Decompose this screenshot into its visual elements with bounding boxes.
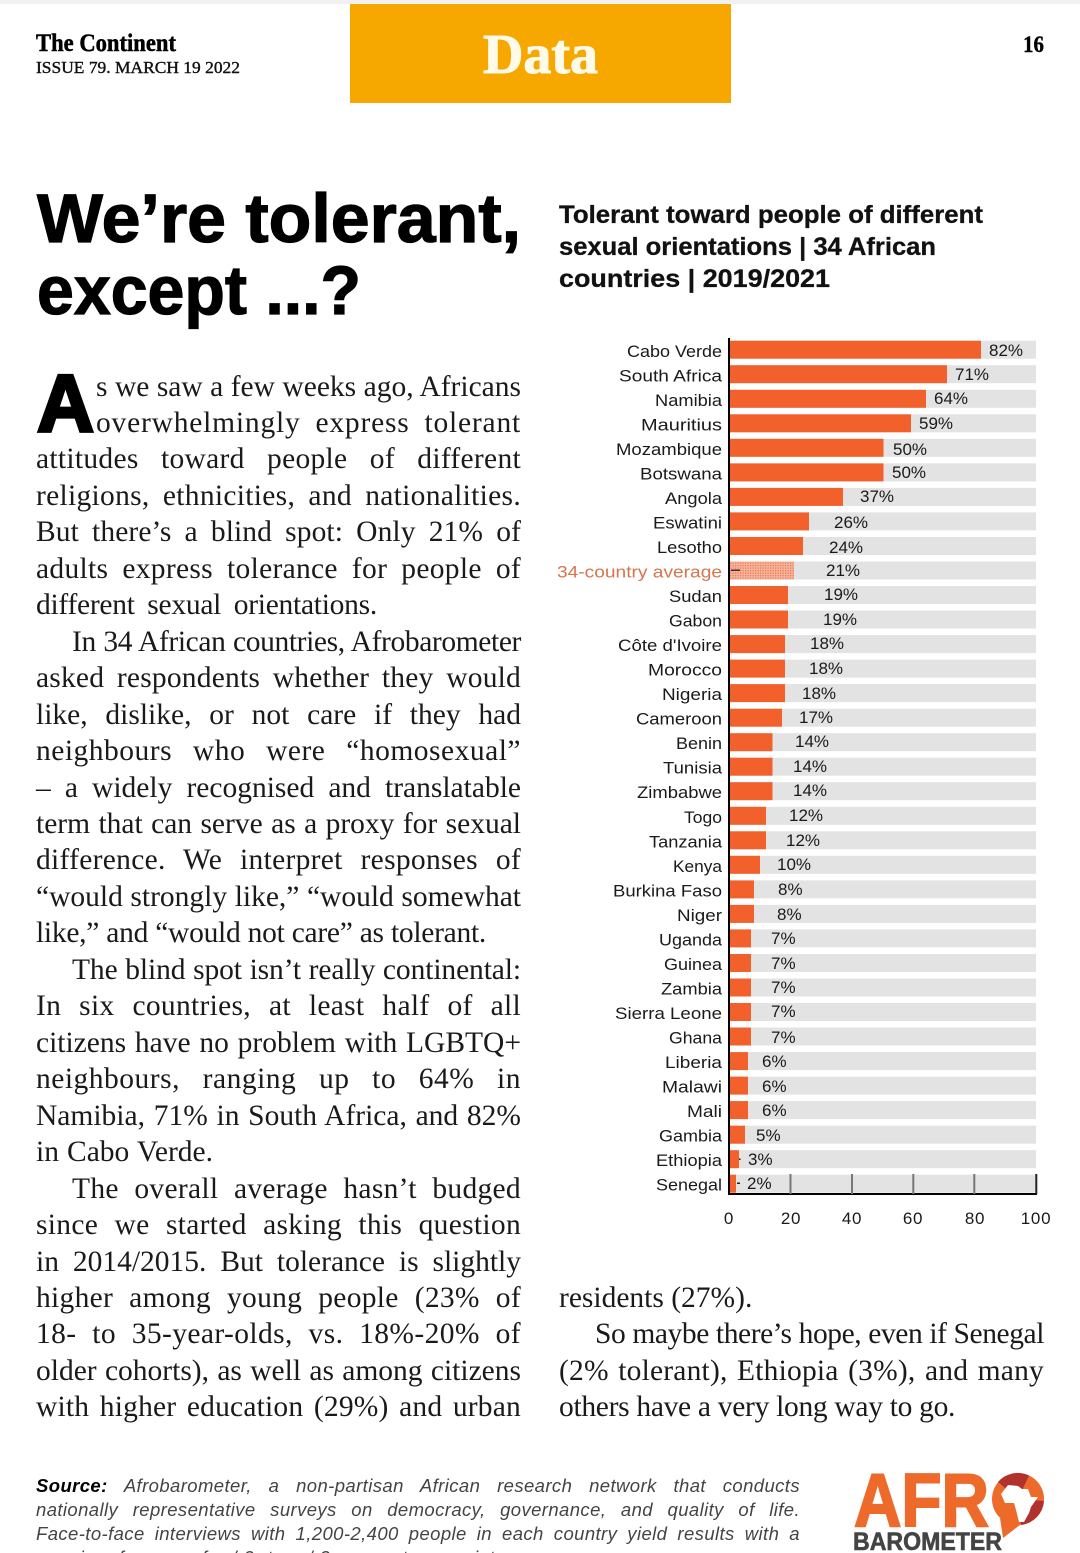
article paragraph 2: like, dislike, or not care if they had bbox=[36, 699, 521, 731]
bar: 34-country average: 34-country average bbox=[557, 563, 722, 582]
bar: Gambia: 5% bbox=[756, 1126, 781, 1145]
bar: Morocco bbox=[648, 659, 1036, 680]
bar: Ghana bbox=[669, 1028, 1036, 1048]
bar: Cabo Verde bbox=[627, 341, 1036, 361]
bar: Lesotho bbox=[657, 537, 1036, 557]
article paragraph 4 bbox=[36, 1173, 521, 1423]
article right column continuation: others have a very long way to go. bbox=[559, 1391, 955, 1423]
article paragraph 1: religions, ethnicities, and nationalities. bbox=[36, 480, 521, 512]
bar: Malawi: Malawi bbox=[662, 1078, 722, 1097]
chart axes and ticks: 60 bbox=[903, 1209, 923, 1228]
bar: Senegal: 2% bbox=[747, 1174, 772, 1193]
bar: Zambia: Zambia bbox=[661, 980, 723, 998]
bar: Nigeria bbox=[662, 684, 1036, 704]
drop cap A: A bbox=[37, 359, 94, 449]
article right column continuation: residents (27%). bbox=[559, 1282, 752, 1314]
chart title: countries | 2019/2021 bbox=[559, 265, 830, 293]
bar: Benin bbox=[676, 732, 1036, 753]
bar: Burkina Faso bbox=[613, 880, 1036, 900]
bar: Gabon: Gabon bbox=[669, 612, 722, 630]
bar: Uganda bbox=[659, 929, 1036, 949]
article right column continuation: (2% tolerant), Ethiopia (3%), and many bbox=[559, 1355, 1044, 1387]
chart axes and ticks bbox=[724, 338, 1051, 1228]
bar: Eswatini: 26% bbox=[834, 513, 868, 532]
bar: Tanzania: 12% bbox=[786, 831, 820, 850]
bar: Côte d'Ivoire: Côte d'Ivoire bbox=[618, 636, 722, 655]
article right column continuation bbox=[559, 1282, 1044, 1423]
main headline: except ...? bbox=[37, 252, 361, 329]
article paragraph 3: The blind spot isn’t really continental: bbox=[72, 954, 521, 986]
bar: Nigeria: 18% bbox=[802, 684, 836, 703]
bar: Gambia bbox=[659, 1126, 1036, 1146]
bar: Guinea: Guinea bbox=[664, 955, 723, 974]
chart title: sexual orientations | 34 African bbox=[559, 233, 936, 261]
logo: Afrobarometer bbox=[853, 1458, 1044, 1553]
bar: Ghana: Ghana bbox=[669, 1028, 723, 1048]
chart axes and ticks: 40 bbox=[842, 1209, 862, 1228]
article paragraph 4: The overall average hasn’t budged bbox=[72, 1173, 521, 1205]
article paragraph 3: neighbours, ranging up to 64% in bbox=[36, 1063, 521, 1095]
article paragraph 1: different sexual orientations. bbox=[36, 589, 377, 621]
bar: South Africa: 71% bbox=[955, 365, 989, 384]
bar: Cameroon: 17% bbox=[799, 708, 833, 727]
bar: Gabon: 19% bbox=[823, 610, 857, 629]
bar: Burkina Faso: 8% bbox=[778, 880, 803, 899]
article paragraph 3 bbox=[36, 954, 521, 1168]
bar: Namibia: Namibia bbox=[655, 391, 723, 410]
article paragraph 2: term that can serve as a proxy for sexual bbox=[36, 808, 521, 840]
bar: Cabo Verde: 82% bbox=[989, 341, 1023, 360]
article paragraph 3: Namibia, 71% in South Africa, and 82% bbox=[36, 1100, 521, 1132]
bar: Namibia: 64% bbox=[934, 389, 968, 408]
bar: Zambia bbox=[661, 978, 1036, 998]
bar: Zimbabwe bbox=[637, 781, 1036, 802]
bar: Kenya: 10% bbox=[777, 855, 811, 874]
main headline: We’re tolerant, bbox=[37, 180, 521, 257]
bar: 34-country average bbox=[557, 561, 1036, 582]
bar: 34-country average: 21% bbox=[826, 561, 860, 580]
bar: Eswatini: Eswatini bbox=[653, 514, 722, 532]
bar: Mali bbox=[687, 1101, 1036, 1121]
source note: nationally representative surveys on democracy, governance, and quality of life. bbox=[36, 1499, 800, 1520]
article right column continuation: So maybe there’s hope, even if Senegal bbox=[595, 1318, 1044, 1350]
bar: Gabon bbox=[669, 610, 1036, 630]
bar: Uganda: Uganda bbox=[659, 930, 723, 949]
bar: Nigeria: Nigeria bbox=[662, 685, 723, 704]
bar: Tunisia: Tunisia bbox=[663, 759, 723, 778]
bar: Angola bbox=[665, 487, 1036, 508]
page number: 16 bbox=[1023, 32, 1044, 57]
bar: Angola: 37% bbox=[860, 487, 894, 506]
bar: Zimbabwe: 14% bbox=[793, 781, 827, 800]
bar: Kenya: Kenya bbox=[673, 857, 723, 876]
bar: Cameroon bbox=[636, 708, 1036, 729]
bar: Benin: 14% bbox=[795, 732, 829, 751]
main headline bbox=[37, 180, 521, 329]
bar: Tanzania bbox=[649, 831, 1036, 851]
bar: Mauritius: Mauritius bbox=[641, 416, 722, 434]
logo speech bubble with Africa bbox=[992, 1473, 1044, 1538]
bar: South Africa: South Africa bbox=[619, 366, 723, 386]
bar: Morocco: 18% bbox=[809, 659, 843, 678]
article paragraph 2 bbox=[36, 626, 522, 949]
bar: Sierra Leone bbox=[615, 1002, 1036, 1023]
chart title: Tolerant toward people of different bbox=[559, 201, 984, 229]
article paragraph 1: overwhelmingly express tolerant bbox=[96, 407, 521, 439]
bar: Tunisia: 14% bbox=[793, 757, 827, 776]
bar: Tanzania: Tanzania bbox=[649, 832, 723, 851]
article paragraph 3: citizens have no problem with LGBTQ+ bbox=[36, 1027, 521, 1059]
bar: Ethiopia: 3% bbox=[748, 1150, 773, 1169]
bar: Mali: Mali bbox=[687, 1102, 722, 1121]
article paragraph 4: with higher education (29%) and urban bbox=[36, 1391, 521, 1423]
bar: Sudan: Sudan bbox=[669, 587, 722, 606]
bar: Mozambique: 50% bbox=[893, 440, 927, 459]
bar: Cabo Verde: Cabo Verde bbox=[627, 342, 722, 361]
bar: Liberia bbox=[665, 1052, 1036, 1072]
bar: South Africa bbox=[619, 365, 1036, 386]
article paragraph 1 bbox=[36, 370, 521, 621]
bar: Niger: 8% bbox=[777, 905, 802, 924]
bar: Burkina Faso: Burkina Faso bbox=[613, 881, 722, 900]
article paragraph 2: asked respondents whether they would bbox=[36, 662, 521, 694]
source note: Source: Afrobarometer, a non-partisan African research network that conducts bbox=[36, 1475, 800, 1496]
article paragraph 4: since we started asking this question bbox=[36, 1209, 521, 1241]
bar: Senegal bbox=[656, 1174, 1036, 1195]
bar: Uganda: 7% bbox=[771, 929, 796, 948]
masthead: publication name and issue bbox=[36, 30, 240, 77]
article paragraph 3: In six countries, at least half of all bbox=[36, 990, 521, 1022]
bar: Ethiopia: Ethiopia bbox=[656, 1151, 723, 1170]
bar: Togo: Togo bbox=[684, 808, 722, 827]
bar: Namibia bbox=[655, 389, 1036, 410]
article paragraph 2: “would strongly like,” “would somewhat bbox=[36, 881, 521, 913]
bar: Liberia: Liberia bbox=[665, 1053, 723, 1072]
masthead: publication name and issue: The Continent bbox=[36, 30, 177, 57]
bar: Togo bbox=[684, 806, 1036, 827]
article paragraph 4: higher among young people (23% of bbox=[36, 1282, 521, 1314]
chart axes and ticks: 100 bbox=[1021, 1209, 1051, 1228]
bar: Morocco: Morocco bbox=[648, 661, 722, 680]
section banner: Data bbox=[350, 4, 731, 103]
bar: Mauritius: 59% bbox=[919, 414, 953, 433]
bar: Lesotho: 24% bbox=[829, 538, 863, 557]
bar: Guinea: 7% bbox=[771, 954, 796, 973]
source note bbox=[36, 1475, 800, 1553]
bar: Mozambique: Mozambique bbox=[616, 440, 722, 459]
bar: Liberia: 6% bbox=[762, 1052, 787, 1071]
chart title bbox=[559, 201, 984, 293]
bar: Sierra Leone: 7% bbox=[771, 1002, 796, 1021]
bar: Zambia: 7% bbox=[771, 978, 796, 997]
bar: Senegal: Senegal bbox=[656, 1176, 722, 1195]
article paragraph 1: But there’s a blind spot: Only 21% of bbox=[36, 516, 521, 548]
bar: Benin: Benin bbox=[676, 734, 722, 753]
article paragraph 2: In 34 African countries, Afrobarometer bbox=[72, 626, 521, 658]
chart axes and ticks: 0 bbox=[724, 1209, 734, 1228]
article paragraph 2: like,” and “would not care” as tolerant. bbox=[36, 917, 486, 949]
bar: Mauritius bbox=[641, 414, 1036, 434]
bar: Niger: Niger bbox=[677, 906, 722, 925]
bar: Gambia: Gambia bbox=[659, 1127, 723, 1146]
masthead: publication name and issue: ISSUE 79. MARCH 19 2022 bbox=[36, 58, 240, 77]
bar: Mozambique bbox=[616, 439, 1036, 459]
section banner: Data: Data bbox=[483, 24, 598, 86]
article paragraph 4: 18- to 35-year-olds, vs. 18%-20% of bbox=[36, 1318, 521, 1350]
bar: Kenya bbox=[673, 855, 1036, 876]
bar: Guinea bbox=[664, 954, 1036, 974]
bar: Togo: 12% bbox=[789, 806, 823, 825]
bar: Cameroon: Cameroon bbox=[636, 710, 722, 729]
chart axes and ticks: 80 bbox=[965, 1209, 985, 1228]
bar: Côte d'Ivoire: 18% bbox=[810, 634, 844, 653]
bar: Niger bbox=[677, 905, 1036, 925]
bar: Botswana: Botswana bbox=[640, 464, 723, 484]
article paragraph 3: in Cabo Verde. bbox=[36, 1136, 213, 1168]
bar chart: tolerance by country bbox=[557, 338, 1051, 1553]
bar: Côte d'Ivoire bbox=[618, 634, 1036, 655]
bar: Sierra Leone: Sierra Leone bbox=[615, 1004, 722, 1023]
article paragraph 4: older cohorts), as well as among citizens bbox=[36, 1355, 521, 1387]
bar: Zimbabwe: Zimbabwe bbox=[637, 783, 722, 802]
article paragraph 1: attitudes toward people of different bbox=[36, 443, 521, 475]
article paragraph 2: neighbours who were “homosexual” bbox=[36, 735, 521, 767]
chart axes and ticks: 20 bbox=[781, 1209, 801, 1228]
article paragraph 4: in 2014/2015. But tolerance is slightly bbox=[36, 1246, 521, 1278]
bar: Botswana: 50% bbox=[892, 463, 926, 482]
source note: Face-to-face interviews with 1,200-2,400 people in each country yield results with a bbox=[36, 1523, 800, 1544]
logo wordmark AFR: AFR bbox=[854, 1458, 989, 1542]
bar: Mali: 6% bbox=[762, 1101, 787, 1120]
bar: Eswatini bbox=[653, 512, 1036, 532]
article paragraph 1: adults express tolerance for people of bbox=[36, 553, 521, 585]
bar: Ethiopia bbox=[656, 1150, 1036, 1170]
article paragraph 1: s we saw a few weeks ago, Africans bbox=[96, 370, 521, 402]
bar: Sudan bbox=[669, 585, 1036, 606]
bar: Botswana bbox=[640, 463, 1036, 484]
bar: Ghana: 7% bbox=[771, 1028, 796, 1047]
bar: Malawi: 6% bbox=[762, 1077, 787, 1096]
article paragraph 2: – a widely recognised and translatable bbox=[36, 772, 521, 804]
bar: Angola: Angola bbox=[665, 489, 723, 508]
bar: Tunisia bbox=[663, 757, 1036, 778]
bar: Malawi bbox=[662, 1077, 1036, 1097]
bar: Sudan: 19% bbox=[824, 585, 858, 604]
article paragraph 2: difference. We interpret responses of bbox=[36, 844, 521, 876]
bar: Lesotho: Lesotho bbox=[657, 538, 722, 557]
